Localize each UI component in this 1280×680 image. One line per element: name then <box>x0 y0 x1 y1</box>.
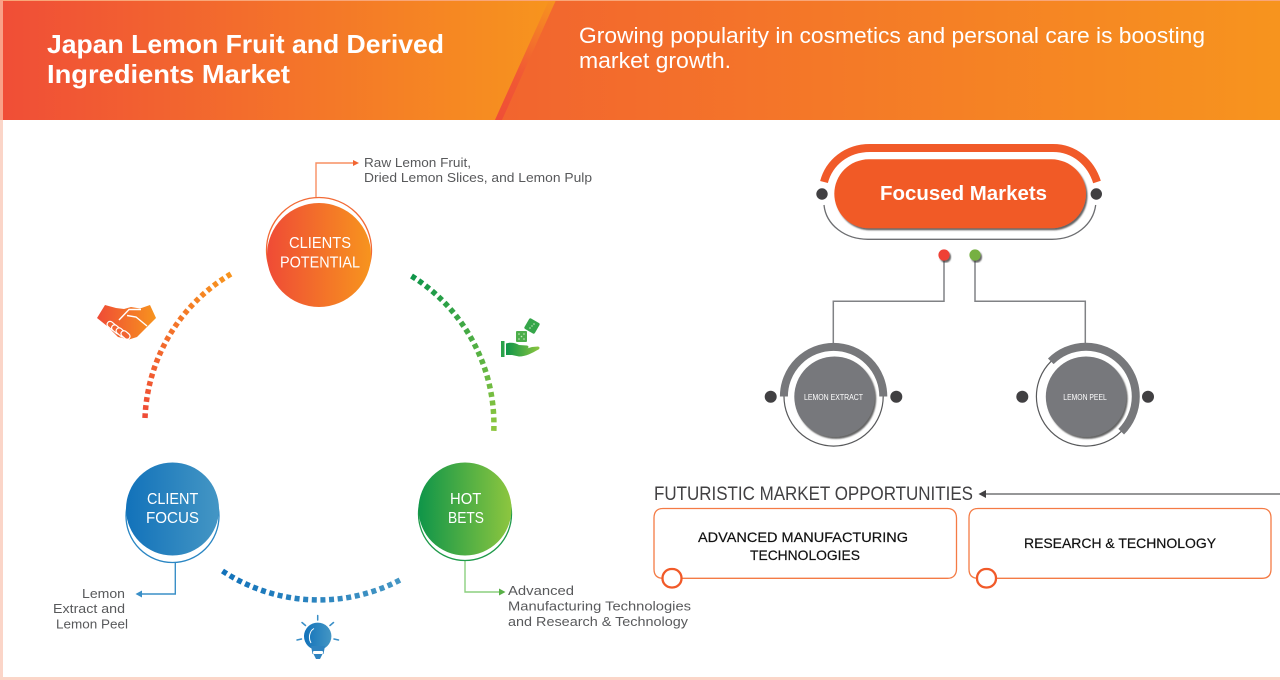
arrow: to futuristic heading <box>978 490 1280 498</box>
node: client focus <box>126 462 219 598</box>
dotted arc: green <box>412 276 494 431</box>
dotted arc: orange <box>145 274 231 418</box>
heading: futuristic market opportunities: FUTURISTIC MARKET OPPORTUNITIES <box>654 484 973 505</box>
focused markets header: Focused Markets <box>880 183 1047 205</box>
segment: lemon peel: LEMON PEEL <box>1063 392 1107 402</box>
label: hot bets: Manufacturing Technologies <box>508 598 692 614</box>
node: clients potential: CLIENTS <box>289 235 351 252</box>
card: advanced manufacturing technologies <box>654 508 956 588</box>
node: hot bets <box>418 462 512 596</box>
node: client focus: FOCUS <box>146 510 199 527</box>
segment: lemon extract <box>765 347 902 446</box>
card: advanced manufacturing technologies: ADVANCED MANUFACTURING <box>698 529 908 545</box>
label: client focus: Lemon <box>82 586 125 601</box>
icon: light bulb <box>297 616 338 659</box>
node: clients potential <box>266 160 372 307</box>
title: Japan Lemon Fruit and Derived <box>47 29 444 59</box>
label: client focus: Lemon Peel <box>56 616 128 632</box>
subtitle: market growth. <box>579 48 731 73</box>
segment: lemon peel <box>1016 347 1154 446</box>
label: client focus: Extract and <box>53 601 125 616</box>
title: Ingredients Market <box>47 59 290 89</box>
segment: lemon extract: LEMON EXTRACT <box>804 392 863 402</box>
label: clients potential: Dried Lemon Slices, and Lemon Pulp <box>364 170 592 185</box>
connector: red to lemon extract <box>833 260 944 344</box>
node: client focus: CLIENT <box>147 491 198 508</box>
node: clients potential: POTENTIAL <box>280 254 360 272</box>
label: hot bets: and Research & Technology <box>508 614 689 629</box>
icon: hand with dice <box>501 318 540 357</box>
label: clients potential: Raw Lemon Fruit, <box>364 155 471 170</box>
icon: handshake <box>97 305 156 341</box>
dotted arc: blue <box>222 571 400 600</box>
connector dot: green <box>969 249 981 261</box>
connector dot: red <box>938 249 950 261</box>
node: hot bets: BETS <box>448 510 484 527</box>
label: hot bets: Advanced <box>508 583 574 598</box>
subtitle: Growing popularity in cosmetics and personal care is boosting <box>579 23 1205 48</box>
card: research and technology: RESEARCH & TECHNOLOGY <box>1024 535 1217 551</box>
card: research and technology <box>969 508 1271 588</box>
connector: green to lemon peel <box>975 260 1085 344</box>
focused markets header <box>816 148 1102 239</box>
node: hot bets: HOT <box>450 491 481 508</box>
header banner <box>0 0 1280 120</box>
card: advanced manufacturing technologies: TECHNOLOGIES <box>750 547 860 563</box>
